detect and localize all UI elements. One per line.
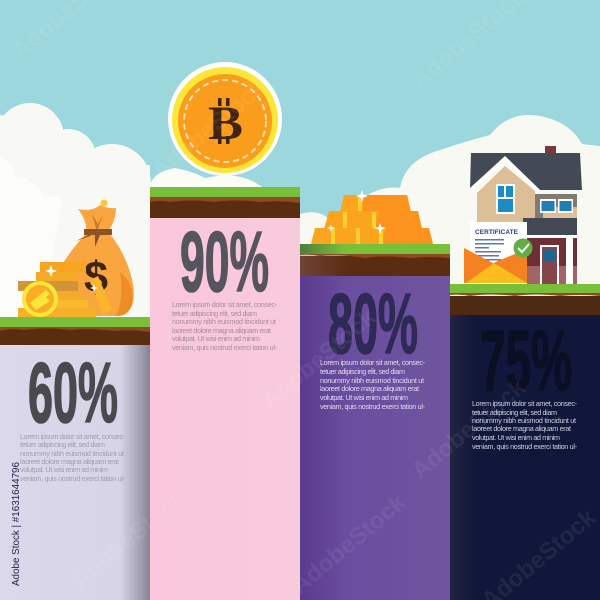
column 3 percentage: 80% (328, 277, 418, 372)
icon: gold bars (311, 190, 433, 244)
column 3 ground (300, 244, 450, 276)
sparkles (45, 265, 57, 277)
column 2 percentage: 90% (180, 215, 269, 310)
column 2 body text: laoreet dolore magna aliquam erat (172, 326, 271, 335)
column 1 ground (0, 317, 150, 345)
column 4 body text (472, 399, 578, 451)
lower wall (527, 238, 577, 266)
gold coin on bag (100, 200, 108, 206)
top row (340, 195, 411, 212)
gable wall (477, 166, 535, 222)
column 4 body text: veniam, quis nostrud exerci tation ul- (472, 442, 578, 451)
upper window (496, 184, 515, 214)
main roof (470, 153, 582, 190)
column 3 body text: tetuer adipiscing elit, sed diam (320, 367, 405, 376)
bottom row (311, 228, 433, 244)
sparkles (356, 190, 368, 202)
column 4 body text: Lorem ipsum dolor sit amet, consec- (472, 399, 578, 408)
column 2 body text: volutpat. Ut wisi enim ad minim (172, 334, 260, 343)
watermark: AdobeStock (257, 303, 382, 415)
icon: money bag and coins (18, 200, 134, 317)
dollar sign: $ (84, 253, 108, 302)
column 2 ground (150, 187, 300, 218)
column 3 body text (320, 358, 426, 411)
right wing windows (540, 199, 573, 213)
large gold coin (22, 281, 58, 317)
watermark: AdobeStock (407, 373, 532, 485)
column 1 body text: Lorem ipsum dolor sit amet, consec- (20, 432, 126, 441)
column 4 body text: volutpat. Ut wisi enim ad minim (472, 433, 560, 442)
column 3 body text: laoreet dolore magna aliquam erat (320, 384, 419, 393)
icon: bitcoin coin: B (208, 97, 243, 150)
column 2: 90% (150, 187, 300, 600)
column 1 body text: nonummy nibh euismod tincidunt ut (20, 449, 124, 458)
column 1 body text: volutpat. Ut wisi enim ad minim (20, 465, 108, 474)
icon: house with certificate (464, 146, 582, 284)
column 1 body text: laoreet dolore magna aliquam erat (20, 457, 119, 466)
column 3 body text: volutpat. Ut wisi enim ad minim (320, 393, 408, 402)
chimney (545, 146, 556, 155)
column 1 body text (20, 432, 126, 483)
column 4 body text: laoreet dolore magna aliquam erat (472, 424, 571, 433)
column 3: 80% (300, 244, 450, 600)
door (540, 245, 559, 284)
coin stacks (18, 262, 96, 317)
bag tie (84, 229, 112, 235)
column 2 body text: Lorem ipsum dolor sit amet, consec- (172, 300, 278, 309)
check badge (514, 238, 532, 258)
money bag (60, 205, 134, 316)
lower roof (523, 218, 577, 235)
column 4 body text: nonummy nibh euismod tincidunt ut (472, 416, 576, 425)
column 3 body text: Lorem ipsum dolor sit amet, consec- (320, 358, 426, 367)
column 4: 75% (450, 284, 600, 600)
column 2 body text: tetuer adipiscing elit, sed diam (172, 309, 257, 318)
middle row (324, 211, 422, 229)
watermark: AdobeStock (147, 73, 272, 185)
watermark: AdobeStock (67, 483, 192, 595)
stock id vertical text: Adobe Stock | #1631644796 (10, 462, 22, 586)
porch column (566, 238, 573, 284)
column 2 body text (172, 300, 278, 352)
leaning coin stack (90, 276, 112, 315)
column 1 body text: tetuer adipiscing elit, sed diam (20, 440, 105, 449)
watermark: AdobeStock (287, 488, 412, 600)
certificate: CERTIFICATE (475, 229, 519, 236)
right wing wall (535, 194, 577, 218)
gable trim (470, 158, 540, 192)
column 1 percentage: 60% (28, 346, 118, 441)
column 1 body text: veniam, quis nostrud exerci tation ul- (20, 474, 126, 483)
column 2 body text: veniam, quis nostrud exerci tation ul- (172, 343, 278, 352)
column 4 ground (450, 284, 600, 315)
envelope (464, 248, 527, 283)
column 1: 60% (0, 317, 150, 600)
icon: bitcoin coin (168, 62, 282, 176)
column 3 body text: nonummy nibh euismod tincidunt ut (320, 376, 424, 385)
column 2 body text: nonummy nibh euismod tincidunt ut (172, 317, 276, 326)
column 4 body text: tetuer adipiscing elit, sed diam (472, 408, 557, 417)
column 3 body text: veniam, quis nostrud exerci tation ul- (320, 402, 426, 411)
